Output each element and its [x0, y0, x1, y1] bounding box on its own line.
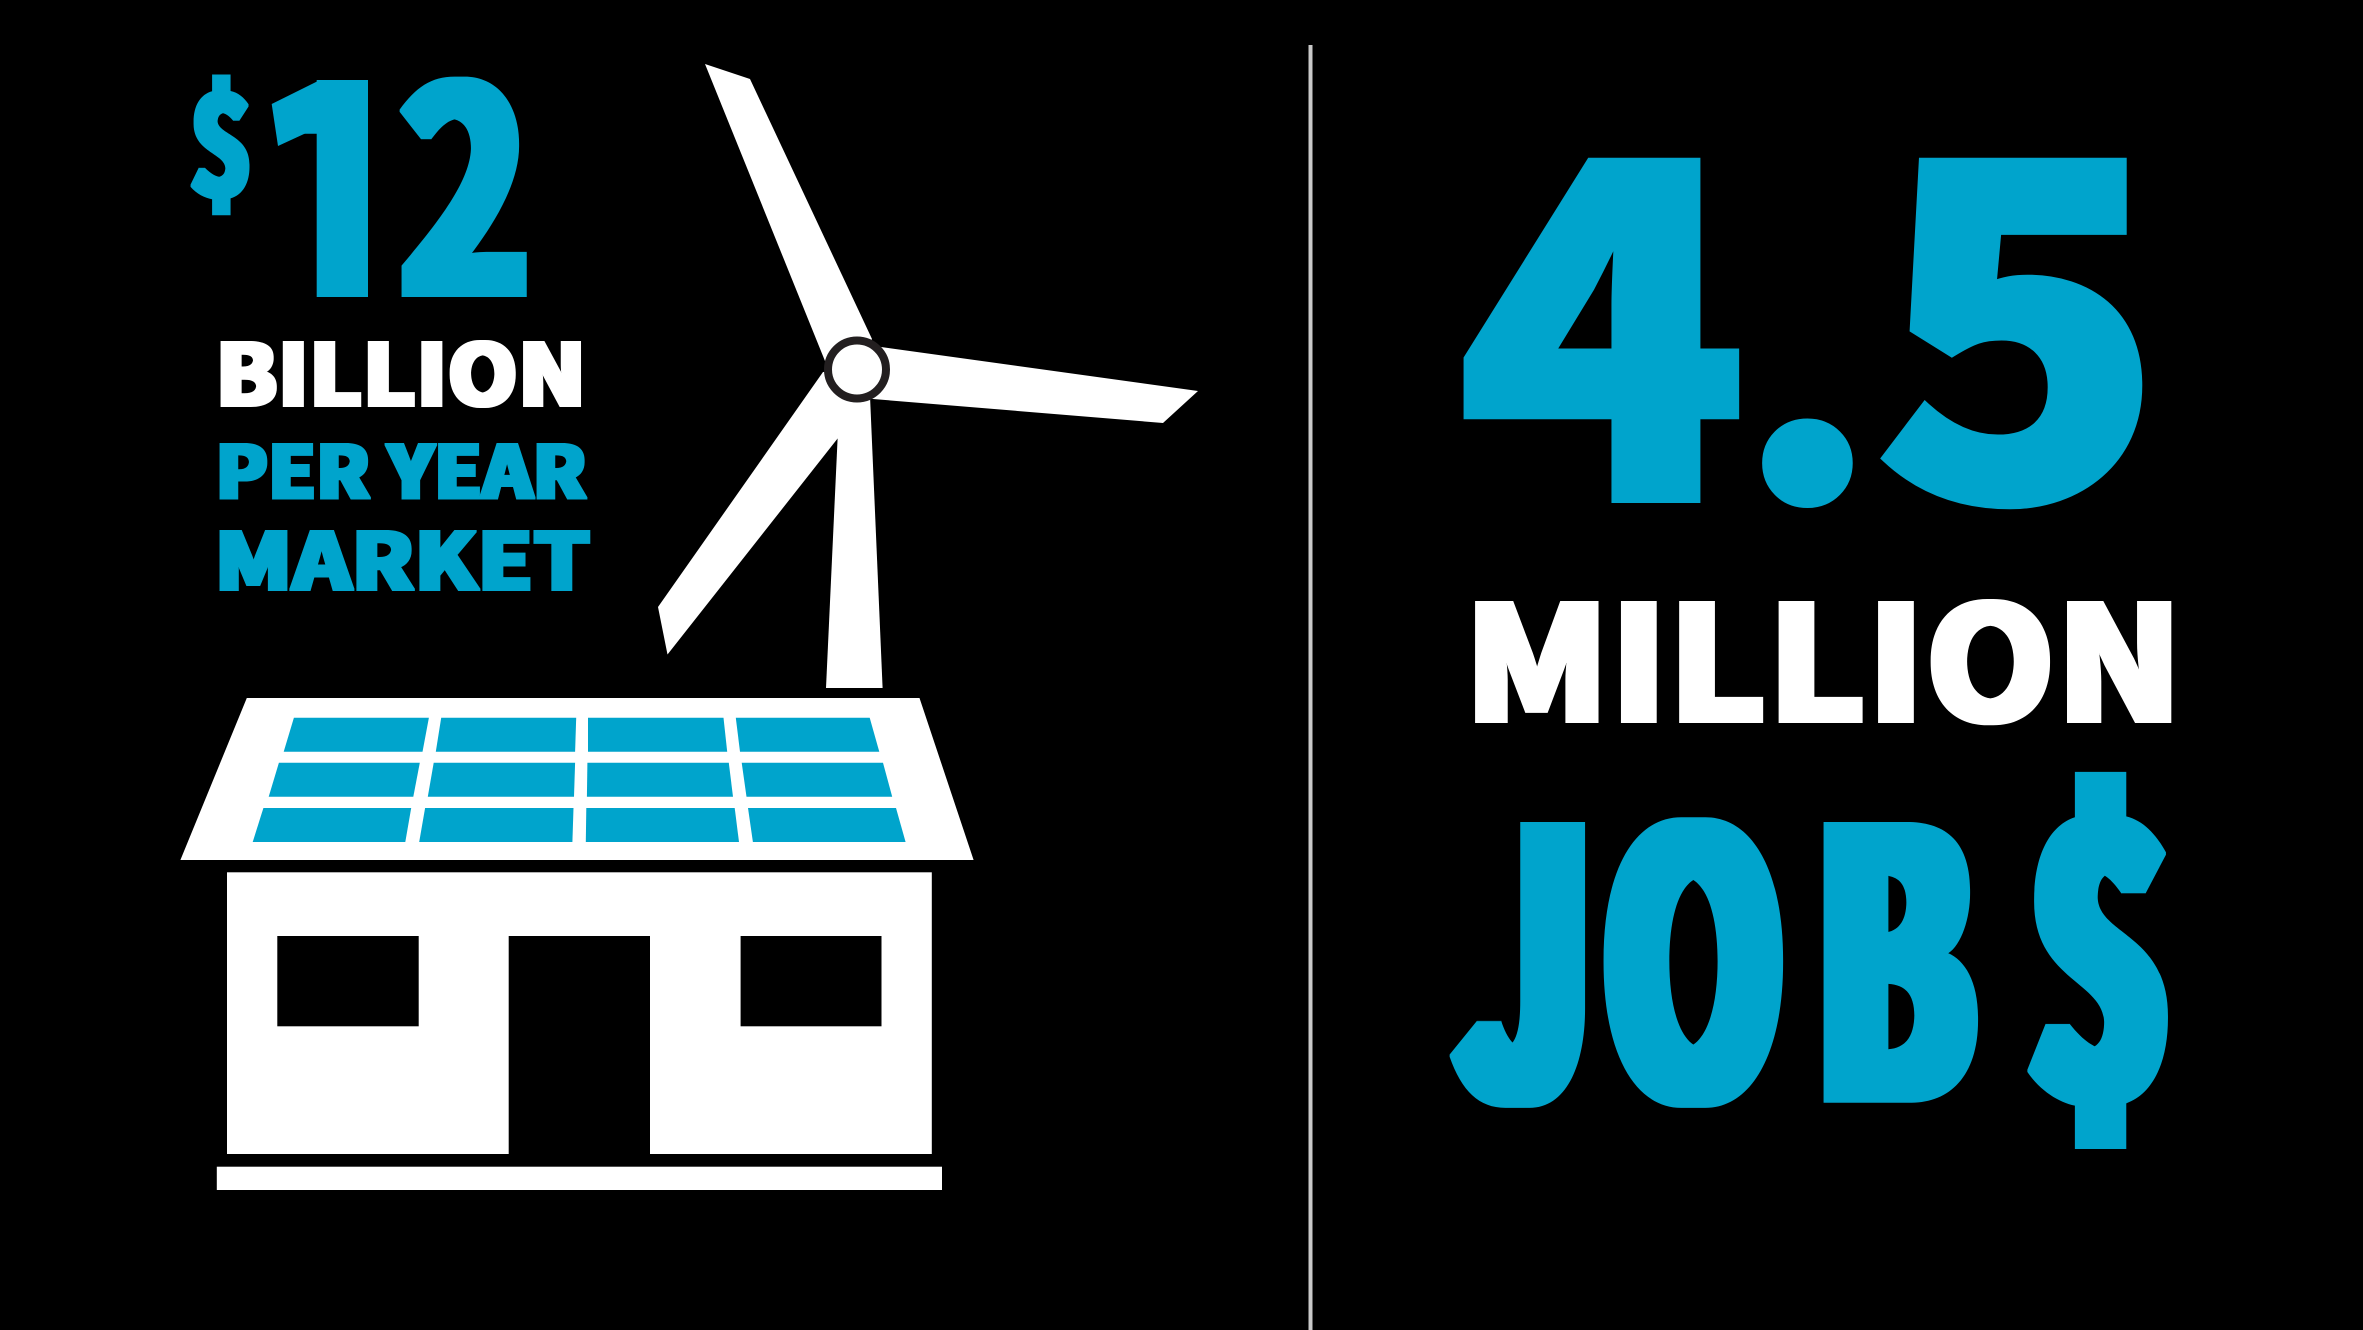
label: billion: BILLION — [215, 306, 586, 431]
heading: 4.5: . — [1741, 82, 1874, 602]
house wall — [227, 872, 932, 1154]
roof — [180, 698, 974, 860]
turbine blade: lower left — [658, 370, 870, 654]
center divider line — [1308, 45, 1312, 1330]
heading: 4.5 — [1458, 0, 2163, 628]
turbine blade: upper — [705, 64, 872, 370]
left window — [277, 936, 419, 1026]
house base — [217, 1167, 942, 1190]
dollar sign: $ — [189, 32, 254, 238]
turbine tower — [826, 396, 883, 688]
label: per year: PER YEAR — [216, 414, 586, 520]
icon: house with solar panels — [180, 698, 974, 1190]
door — [509, 936, 650, 1154]
turbine hub — [828, 340, 886, 398]
solar panels — [253, 718, 906, 842]
heading: jobs: $ — [2029, 654, 2172, 1211]
heading: jobs: JOB — [1458, 669, 1975, 1210]
label: million: MILLION — [1464, 536, 2183, 769]
turbine blade: right — [857, 345, 1198, 423]
icon: wind turbine — [658, 64, 1198, 688]
label: market: MARKET — [214, 498, 590, 613]
right window — [741, 936, 882, 1026]
